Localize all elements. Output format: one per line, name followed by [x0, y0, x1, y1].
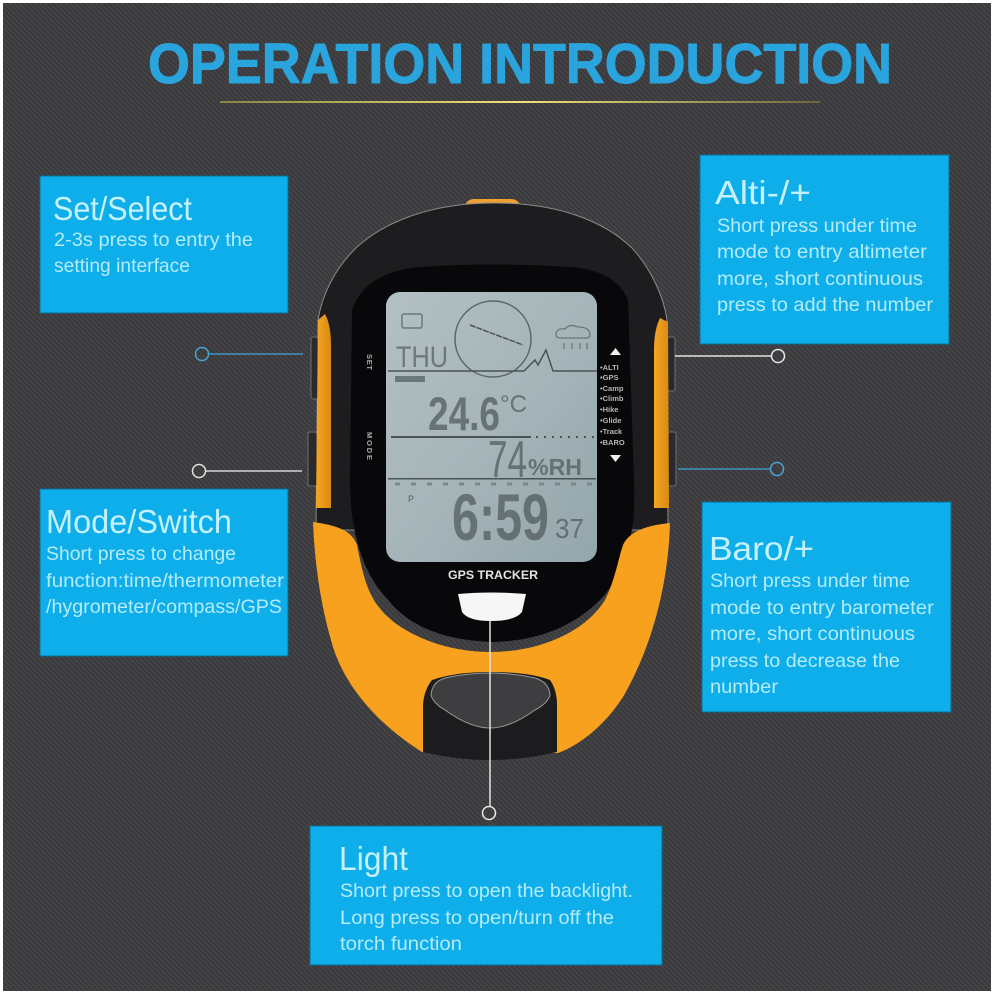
loop hole — [431, 673, 550, 728]
panel: baro: Short press under time — [710, 570, 910, 592]
panel: alti: Short press under time — [717, 215, 917, 237]
side buttons — [308, 337, 676, 486]
LCD readouts: %RH — [528, 454, 582, 480]
panel: light: torch function — [340, 933, 462, 955]
panel: baro: number — [710, 676, 779, 698]
panel: alti: press to add the number — [717, 294, 934, 316]
panel: mode/switch: Mode/Switch — [46, 503, 232, 540]
panel: alti: Alti-/+ — [715, 174, 811, 211]
SET label: SET — [365, 354, 374, 370]
panel: baro: more, short continuous — [710, 623, 915, 645]
temperature: 24.6 — [428, 387, 500, 440]
mode list: •ALTI — [600, 363, 619, 372]
icon: top orange button — [464, 199, 521, 207]
weather icon — [556, 325, 590, 349]
panel: set/select: Set/Select — [53, 190, 192, 227]
mode list: •Camp — [600, 384, 624, 393]
LCD readouts: P — [408, 494, 414, 504]
panel: light: Long press to open/turn off the — [340, 907, 614, 929]
orange lower shell — [313, 522, 670, 753]
mode list: •BARO — [600, 438, 625, 447]
panel: baro: Baro/+ — [709, 530, 814, 567]
black face — [350, 264, 634, 642]
LCD readouts — [388, 301, 597, 554]
time: 6:59 — [452, 480, 549, 554]
humidity: 74 — [488, 431, 527, 489]
MODE label: MODE — [365, 432, 374, 460]
connector: light — [482, 620, 496, 820]
wrist loop — [423, 672, 557, 760]
compass — [455, 301, 531, 377]
icon: light button — [458, 592, 526, 621]
panel: baro: press to decrease the — [710, 650, 900, 672]
altitude mountain — [388, 350, 597, 371]
panel: alti — [700, 155, 949, 344]
panel: alti: more, short continuous — [717, 268, 923, 290]
panel: mode/switch: Short press to change — [46, 543, 236, 565]
panel: baro — [702, 502, 951, 712]
panel: set/select — [40, 176, 288, 313]
panel: light: Short press to open the backlight. — [340, 880, 633, 902]
mode list: •Track — [600, 427, 623, 436]
panel: set/select: 2-3s press to entry the — [54, 229, 253, 251]
LCD screen — [386, 292, 597, 562]
LCD readouts: °C — [500, 391, 527, 418]
title: OPERATION INTRODUCTION — [148, 32, 892, 96]
connector: mode — [192, 464, 302, 478]
mode list — [600, 348, 625, 462]
mode list: •GPS — [600, 373, 618, 382]
panel: mode/switch: /hygrometer/compass/GPS — [46, 596, 282, 618]
panel: alti: mode to entry altimeter — [717, 241, 928, 263]
connector: alti — [675, 350, 784, 362]
icon: battery — [402, 314, 422, 328]
day: THU — [396, 341, 448, 374]
mode list: •Climb — [600, 394, 624, 403]
connector: baro — [678, 462, 784, 476]
panel: baro: mode to entry barometer — [710, 597, 935, 619]
device: GPS tracker — [308, 199, 676, 760]
panel: set/select: setting interface — [54, 255, 190, 277]
device body outline — [316, 203, 668, 530]
connector: set — [196, 348, 303, 360]
panel: mode/switch: function:time/thermometer — [46, 570, 285, 592]
panel: light — [310, 826, 662, 965]
panel: light: Light — [339, 840, 408, 877]
panel: mode/switch — [40, 489, 288, 656]
mode list: •Hike — [600, 405, 618, 414]
GPS TRACKER label: GPS TRACKER — [448, 570, 539, 582]
LCD readouts: 37 — [555, 513, 584, 544]
mode list: •Glide — [600, 416, 621, 425]
orange side grips — [316, 314, 331, 508]
